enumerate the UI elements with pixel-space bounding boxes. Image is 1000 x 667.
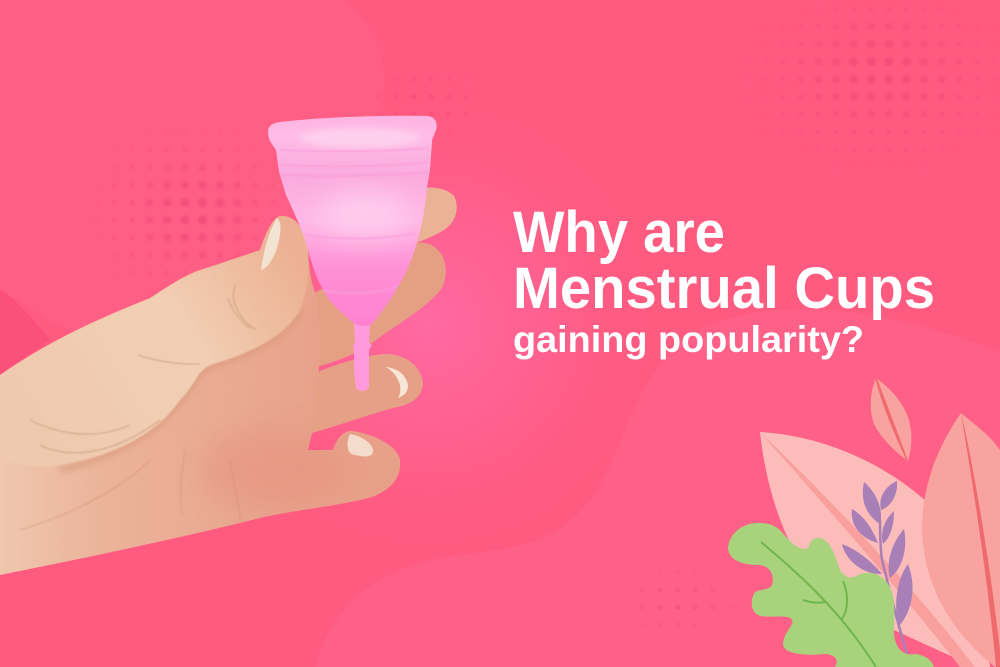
- thumb shadow: [60, 310, 300, 470]
- title: [513, 200, 935, 360]
- thumb: [0, 216, 309, 467]
- third finger: [290, 354, 423, 433]
- cup body: [268, 116, 437, 326]
- hand holding cup: [0, 188, 457, 600]
- cup stem: [353, 322, 372, 391]
- icon: small floating leaf: [871, 378, 911, 461]
- dot pattern: left: [147, 165, 254, 258]
- dot pattern: top right: [816, 26, 944, 116]
- icon: large right leaf: [922, 413, 1000, 667]
- palm shading: [207, 437, 324, 502]
- top finger: [405, 188, 457, 246]
- subheading: gaining popularity?: [513, 319, 864, 360]
- icon: purple sprig: [842, 481, 913, 656]
- palm creases: [20, 450, 240, 530]
- thumb creases: [30, 285, 256, 453]
- third finger nail: [386, 367, 408, 398]
- cup highlights: [300, 128, 420, 148]
- illustration: leaves: [728, 378, 1000, 667]
- heading line 1: Why are: [513, 200, 725, 265]
- thumb nail: [261, 218, 280, 270]
- palm and thumb: [0, 216, 400, 575]
- dot pattern: bottom: [658, 588, 698, 610]
- dot pattern: top centre: [414, 96, 433, 114]
- menstrual cup: [268, 116, 437, 391]
- heading line 2: Menstrual Cups: [513, 256, 935, 321]
- pinky nail: [347, 434, 373, 456]
- second finger: [295, 242, 446, 368]
- icon: large pale leaf: [760, 432, 990, 667]
- icon: green leaf: [728, 523, 934, 667]
- cup ridges: [280, 148, 429, 293]
